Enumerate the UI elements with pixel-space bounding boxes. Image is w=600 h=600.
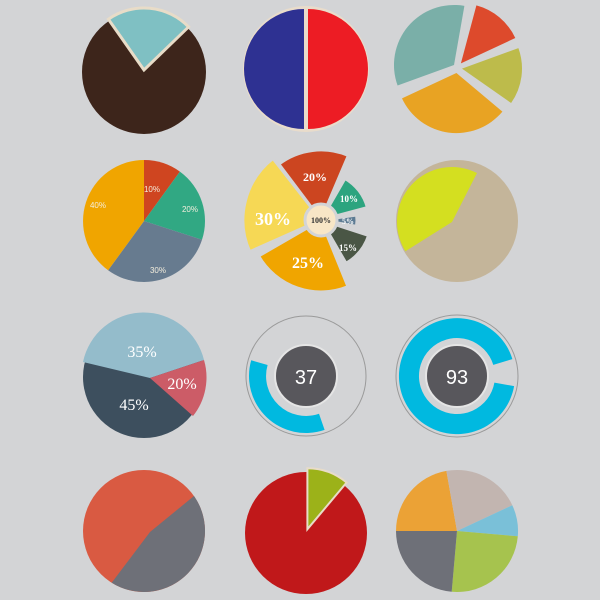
- chart 1: brown pie with teal slice: [82, 8, 206, 134]
- chart 7: pie 35/20/45: [83, 313, 206, 438]
- chart 5: radial bar pie with center 100%: 100%: [311, 216, 331, 225]
- chart 9: gauge 93: [396, 315, 518, 437]
- chart 5: radial bar pie with center 100%: 25%: [292, 255, 324, 272]
- chart 4: pie with percent labels: 30%: [150, 266, 166, 275]
- chart 7: pie 35/20/45: 20%: [167, 376, 197, 393]
- chart 4: pie with percent labels: [83, 160, 205, 282]
- chart 8: gauge 37: [246, 316, 366, 436]
- chart 3: exploded four-slice pie: [394, 5, 522, 133]
- chart 5: radial bar pie with center 100%: 15%: [339, 243, 357, 253]
- chart 8: gauge 37: 37: [295, 367, 317, 389]
- chart 5: radial bar pie with center 100%: 10%: [340, 194, 358, 204]
- chart 6: tan circle with yellow-green wedge: [396, 160, 518, 282]
- chart 5: radial bar pie with center 100%: 20%: [303, 170, 327, 184]
- chart 7: pie 35/20/45: 45%: [119, 397, 149, 414]
- chart 5: radial bar pie with center 100%: [243, 150, 369, 292]
- chart 9: gauge 93: 93: [446, 367, 468, 389]
- chart 4: pie with percent labels: 20%: [182, 205, 198, 214]
- chart 12: five-slice pie: [396, 470, 518, 592]
- chart 10: red and gray pie: [83, 470, 205, 592]
- chart 5: radial bar pie with center 100%: 5%: [342, 217, 354, 226]
- chart 4: pie with percent labels: 40%: [90, 201, 106, 210]
- chart 11: red pie with green slice: [245, 468, 367, 594]
- chart 2: blue and red halves: [243, 6, 369, 132]
- chart 5: radial bar pie with center 100%: 30%: [255, 209, 291, 229]
- chart 7: pie 35/20/45: 35%: [127, 344, 157, 361]
- chart 4: pie with percent labels: 10%: [144, 185, 160, 194]
